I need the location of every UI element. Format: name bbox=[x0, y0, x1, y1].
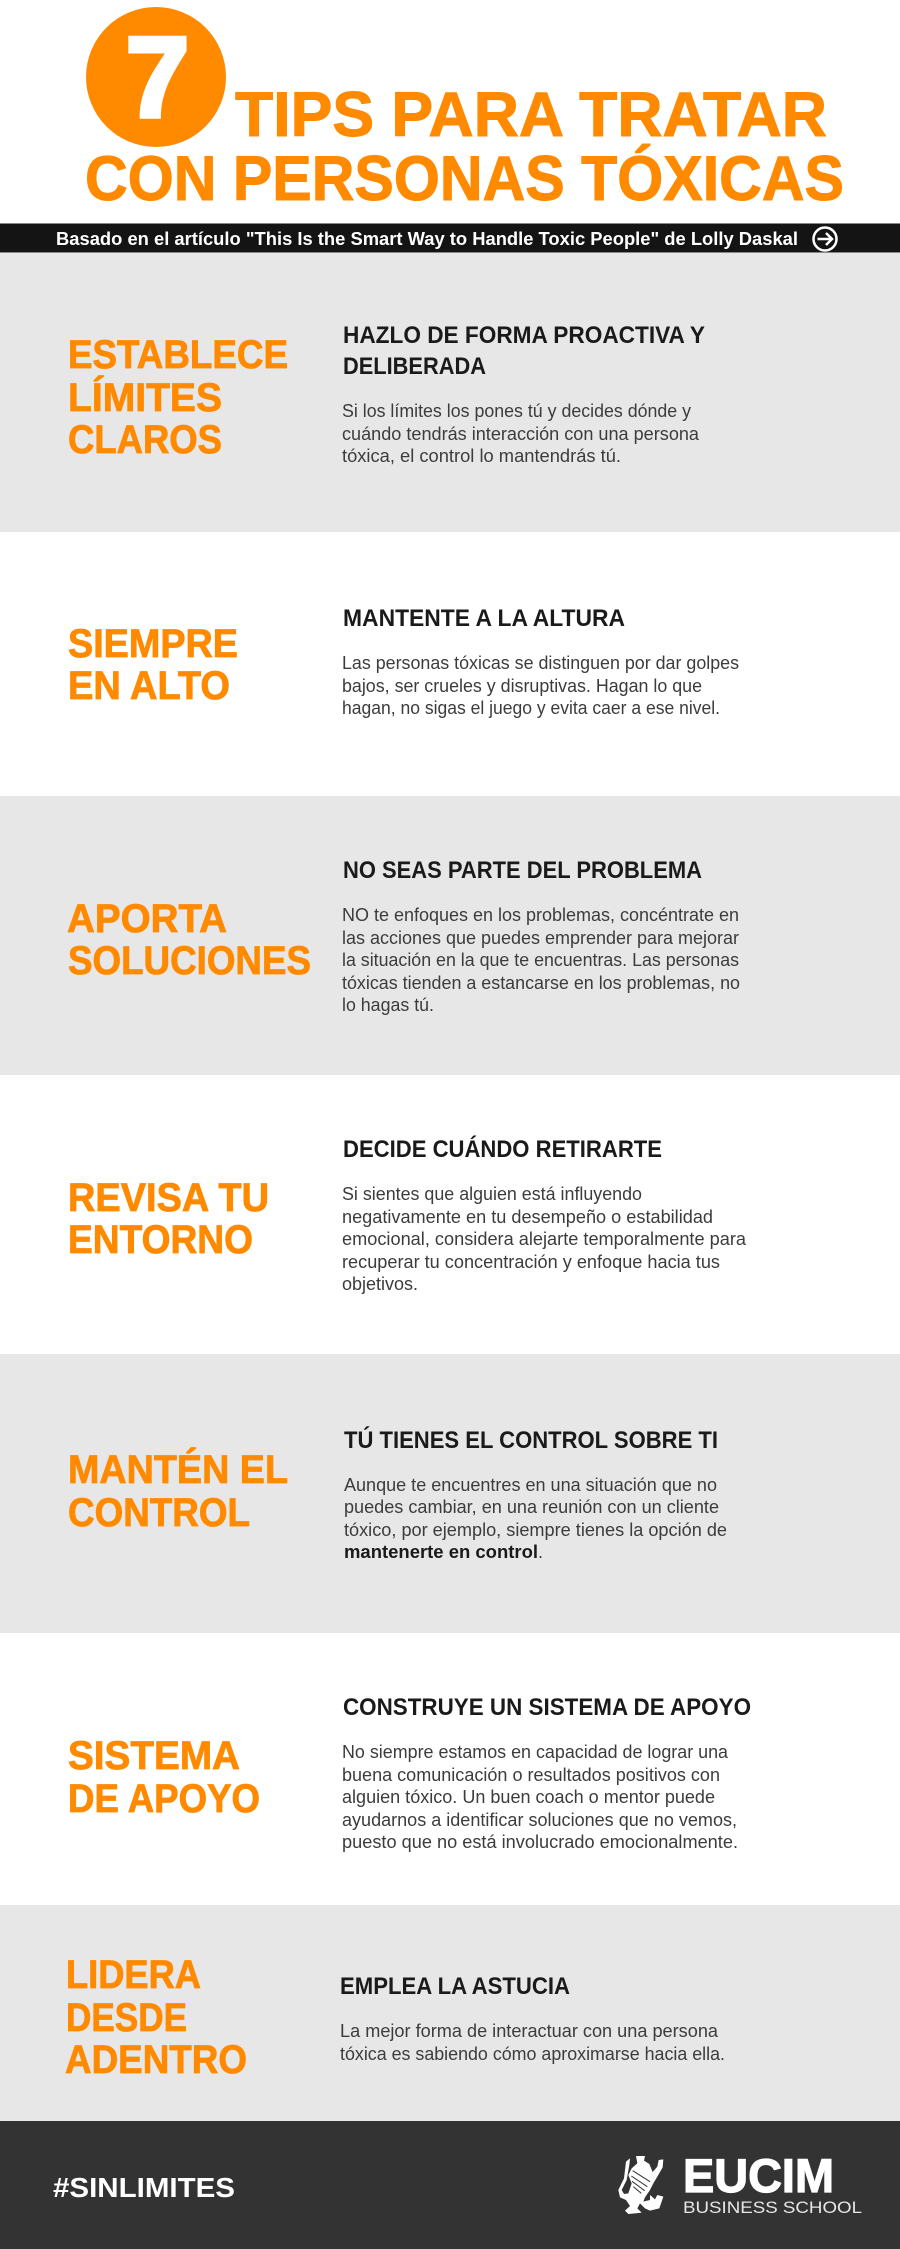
tip text: ayudarnos a identificar soluciones que no vemos, bbox=[342, 1810, 737, 1830]
source text: Basado en el artículo "This Is the Smart Way to Handle Toxic People" de Lolly Daskal bbox=[56, 229, 798, 249]
tip text: cuándo tendrás interacción con una persona bbox=[342, 424, 700, 444]
tip heading: EMPLEA LA ASTUCIA bbox=[340, 1973, 570, 2000]
tip text: Aunque te encuentres en una situación que no bbox=[344, 1475, 717, 1495]
tip text: puedes cambiar, en una reunión con un cliente bbox=[344, 1497, 719, 1517]
panel: revisa tu entorno bbox=[0, 1075, 900, 1354]
tip text: Si los límites los pones tú y decides dónde y bbox=[342, 401, 691, 421]
tip text: objetivos. bbox=[342, 1274, 418, 1294]
tip name: CONTROL bbox=[68, 1491, 250, 1535]
tip name bbox=[67, 897, 311, 983]
panel: lidera desde adentro bbox=[0, 1905, 900, 2121]
tip name bbox=[68, 1447, 288, 1535]
source bar bbox=[0, 223, 900, 253]
hashtag: #SINLIMITES bbox=[53, 2172, 235, 2203]
tip name: SOLUCIONES bbox=[68, 939, 311, 983]
tip name bbox=[68, 1734, 260, 1821]
tip name: SISTEMA bbox=[68, 1734, 240, 1778]
title line 1: TIPS PARA TRATAR bbox=[235, 80, 827, 150]
title bbox=[85, 7, 844, 214]
tip name bbox=[68, 622, 238, 708]
number badge: 7 bbox=[126, 14, 189, 140]
tip text: mantenerte en control bbox=[344, 1542, 538, 1562]
tip text: hagan, no sigas el juego y evita caer a ese nivel. bbox=[342, 698, 720, 718]
panel: establece limites claros bbox=[0, 253, 900, 532]
tip name: MANTÉN EL bbox=[68, 1447, 288, 1492]
panel: aporta soluciones bbox=[0, 796, 900, 1075]
tip name: LIDERA bbox=[66, 1953, 201, 1997]
tip text: NO te enfoques en los problemas, concéntrate en bbox=[342, 905, 739, 925]
tip name: CLAROS bbox=[68, 418, 222, 462]
tip text bbox=[342, 401, 700, 466]
tip text bbox=[342, 905, 740, 1015]
tip heading bbox=[343, 322, 705, 380]
tip text: alguien tóxico. Un buen coach o mentor puede bbox=[342, 1787, 715, 1807]
tip text bbox=[342, 1742, 738, 1852]
title line 2: CON PERSONAS TÓXICAS bbox=[85, 144, 844, 214]
tip name: DE APOYO bbox=[68, 1777, 260, 1821]
tip text: La mejor forma de interactuar con una persona bbox=[340, 2021, 719, 2041]
tip name: APORTA bbox=[67, 897, 227, 941]
tip name bbox=[65, 1953, 247, 2082]
tip text: lo hagas tú. bbox=[342, 995, 434, 1015]
icon: arrow in circle bbox=[814, 228, 836, 250]
tip text: Las personas tóxicas se distinguen por dar golpes bbox=[342, 653, 739, 673]
tip text: negativamente en tu desempeño o estabilidad bbox=[342, 1207, 713, 1227]
tip name bbox=[68, 1176, 269, 1262]
tip name: ENTORNO bbox=[68, 1218, 253, 1262]
tip heading: NO SEAS PARTE DEL PROBLEMA bbox=[343, 857, 702, 884]
tip text: tóxica es sabiendo cómo aproximarse hacia ella. bbox=[340, 2044, 725, 2064]
wordmark: EUCIM bbox=[683, 2149, 834, 2202]
tip text bbox=[342, 653, 739, 718]
icon: lion bbox=[618, 2156, 663, 2214]
tagline: BUSINESS SCHOOL bbox=[683, 2198, 862, 2217]
tip text: tóxica, el control lo mantendrás tú. bbox=[342, 446, 621, 466]
tip name: EN ALTO bbox=[68, 664, 230, 708]
number badge bbox=[86, 7, 226, 147]
tip name bbox=[68, 333, 288, 462]
tip heading: MANTENTE A LA ALTURA bbox=[343, 605, 625, 632]
tip heading: TÚ TIENES EL CONTROL SOBRE TI bbox=[344, 1426, 718, 1454]
tip text: . bbox=[538, 1542, 543, 1562]
tip heading: DECIDE CUÁNDO RETIRARTE bbox=[343, 1135, 662, 1163]
tip text: bajos, ser crueles y disruptivas. Hagan lo que bbox=[342, 676, 702, 696]
tip name: DESDE bbox=[66, 1996, 187, 2040]
logo: EUCIM Business School bbox=[618, 2149, 862, 2217]
tip text bbox=[344, 1475, 727, 1562]
tip name: SIEMPRE bbox=[68, 622, 238, 666]
tip text: buena comunicación o resultados positivos con bbox=[342, 1765, 720, 1785]
tip heading: HAZLO DE FORMA PROACTIVA Y bbox=[343, 322, 705, 349]
tip text: emocional, considera alejarte temporalmente para bbox=[342, 1229, 747, 1249]
tip text: No siempre estamos en capacidad de lograr una bbox=[342, 1742, 729, 1762]
tip name: LÍMITES bbox=[68, 375, 222, 420]
panel: manten el control bbox=[0, 1354, 900, 1633]
tip text: Si sientes que alguien está influyendo bbox=[342, 1184, 642, 1204]
tip text: las acciones que puedes emprender para mejorar bbox=[342, 928, 739, 948]
tip text bbox=[342, 1184, 747, 1294]
footer bbox=[0, 2121, 900, 2249]
tip text: tóxico, por ejemplo, siempre tienes la opción de bbox=[344, 1520, 727, 1540]
panel: sistema de apoyo bbox=[0, 1633, 900, 1905]
tip heading: DELIBERADA bbox=[343, 353, 486, 380]
tip name: ADENTRO bbox=[65, 2038, 247, 2082]
tip name: ESTABLECE bbox=[68, 333, 288, 377]
tip text: puesto que no está involucrado emocionalmente. bbox=[342, 1832, 738, 1852]
tip text bbox=[340, 2021, 725, 2064]
tip text: tóxicas tienden a estancarse en los problemas, no bbox=[342, 973, 740, 993]
tip text: la situación en la que te encuentras. Las personas bbox=[342, 950, 739, 970]
tip heading: CONSTRUYE UN SISTEMA DE APOYO bbox=[343, 1694, 751, 1721]
tip text: recuperar tu concentración y enfoque hacia tus bbox=[342, 1252, 720, 1272]
tip name: REVISA TU bbox=[68, 1176, 269, 1220]
panel: siempre en alto bbox=[0, 532, 900, 796]
